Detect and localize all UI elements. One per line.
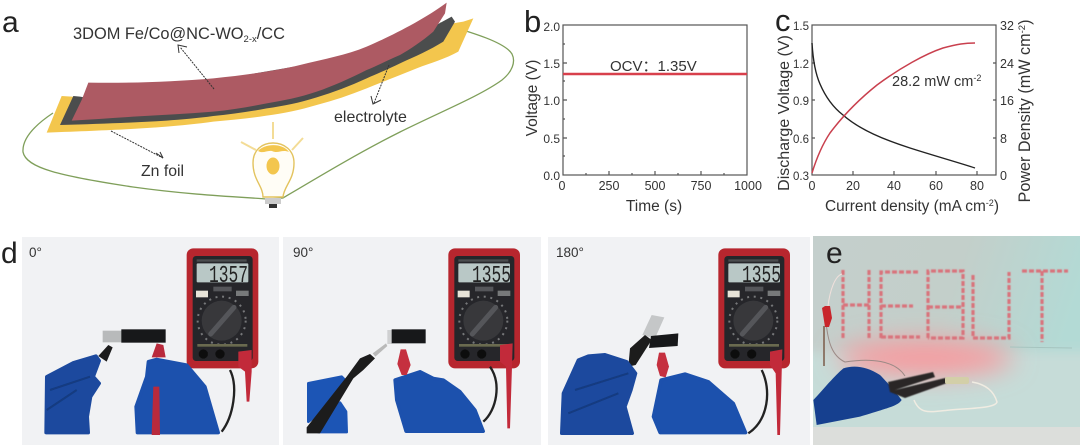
x axis tick labels: 80	[970, 179, 984, 193]
flexible battery strip	[103, 329, 166, 343]
peak power label: -2	[973, 73, 981, 83]
arrow to cathode label	[178, 45, 214, 89]
left glove upper	[308, 377, 347, 422]
paper edge	[1010, 347, 1072, 348]
photo: 90 degrees	[283, 237, 541, 445]
Zn foil layer	[47, 18, 473, 133]
cathode label: 2-x	[244, 34, 257, 45]
panel e: HEBUT LED photo	[790, 236, 1080, 447]
left glove shading	[47, 377, 90, 410]
Zn foil label: Zn foil	[141, 163, 184, 180]
right y axis title: -2	[1017, 25, 1028, 33]
icon: light bulb	[241, 122, 303, 208]
left glove	[46, 356, 99, 433]
lead wires	[483, 367, 497, 422]
photo background	[813, 236, 1080, 358]
electrolyte layer	[60, 17, 455, 125]
photo: 180 degrees	[548, 237, 810, 445]
y axis tick labels: 2.0	[543, 20, 560, 34]
x axis tick labels	[559, 179, 762, 193]
blue gloved hand	[813, 367, 902, 425]
x axis tick labels: 250	[599, 179, 619, 193]
electrolyte label: electrolyte	[334, 109, 407, 126]
right y axis tick labels: 16	[1000, 94, 1014, 108]
y axis tick labels: 0.0	[543, 169, 560, 183]
cathode label: 3DOM Fe/Co@NC-WO	[73, 25, 244, 43]
x axis tick labels: 750	[691, 179, 711, 193]
power density curve	[812, 43, 975, 173]
multimeter 90 degrees	[448, 248, 520, 368]
right y axis tick labels	[1000, 19, 1014, 183]
x axis tick labels	[809, 179, 984, 193]
black probe	[628, 335, 652, 367]
y axis title: Voltage (V)	[524, 60, 541, 136]
panel c: discharge and power density chart	[775, 3, 1034, 215]
meter reading 0 degrees: 1357	[209, 263, 248, 290]
white battery loop wire	[914, 382, 997, 412]
LED letters HEBUT	[843, 270, 1068, 342]
left y axis title: Discharge Voltage (V)	[776, 35, 793, 191]
meter reading 180 degrees: 1355	[742, 263, 781, 290]
panel label a: a	[2, 6, 19, 39]
x axis tick labels: 20	[846, 179, 860, 193]
panel label c: c	[775, 3, 790, 38]
angle label 180: 180°	[556, 245, 584, 260]
discharge voltage curve	[812, 43, 975, 168]
red LED glow	[837, 340, 1013, 376]
black probe	[307, 354, 375, 433]
left glove	[562, 355, 636, 433]
left glove lower	[318, 403, 347, 432]
x axis tick labels: 500	[645, 179, 665, 193]
x axis tick labels: 0	[809, 179, 816, 193]
plot frame and ticks	[812, 25, 996, 175]
y axis tick labels	[543, 20, 560, 183]
peak power label: 28.2 mW cm	[892, 74, 973, 90]
probe metal tip	[373, 343, 387, 357]
panel label e: e	[826, 237, 843, 270]
x axis title: )	[994, 198, 999, 215]
red probe on meter	[238, 350, 252, 402]
right glove	[653, 374, 746, 433]
x axis tick labels: 60	[929, 179, 943, 193]
x axis title: Time (s)	[626, 198, 682, 215]
photo: 0 degrees	[22, 237, 279, 445]
x axis title: -2	[986, 198, 994, 208]
angle label 90: 90°	[293, 245, 313, 260]
y axis tick labels: 0.5	[543, 132, 560, 146]
red probe on meter	[500, 343, 513, 428]
plot frame and ticks	[563, 25, 747, 175]
multimeter 0 degrees	[187, 248, 258, 368]
panel a: battery schematic	[2, 3, 514, 208]
right y axis title: )	[1016, 20, 1034, 25]
x axis tick labels: 40	[887, 179, 901, 193]
lower surface	[813, 352, 1080, 427]
left y axis tick labels: 0.9	[793, 96, 809, 108]
flexible battery strip	[387, 329, 426, 344]
cathode sheet	[72, 3, 447, 121]
left y axis tick labels: 0.6	[793, 134, 809, 146]
external circuit wire	[23, 23, 514, 199]
left y axis tick labels	[793, 21, 809, 183]
left y axis tick labels: 0.3	[793, 171, 809, 183]
x axis tick labels: 0	[559, 179, 566, 193]
lead wires	[222, 370, 234, 432]
red probe tip	[657, 353, 669, 377]
arrow to electrolyte label	[371, 65, 389, 104]
y axis tick labels: 1.0	[543, 94, 560, 108]
multimeter 180 degrees	[718, 248, 790, 368]
y axis tick labels: 1.5	[543, 57, 560, 71]
right y axis tick labels: 0	[1000, 169, 1007, 183]
red clip and wire	[822, 274, 905, 376]
right y axis tick labels: 32	[1000, 19, 1014, 33]
OCV label: OCV：1.35V	[610, 58, 697, 75]
left glove shading	[568, 373, 628, 413]
panel label b: b	[524, 4, 541, 39]
flexible battery strip	[642, 315, 678, 348]
right y axis title: Power Density (mW cm	[1016, 33, 1034, 202]
panel label d: d	[1, 237, 18, 270]
right y axis tick labels: 8	[1000, 132, 1007, 146]
x axis tick labels: 1000	[734, 179, 762, 193]
lead wires	[748, 370, 767, 433]
right y axis tick labels: 24	[1000, 57, 1014, 71]
left y axis tick labels: 1.5	[793, 21, 809, 33]
black clips	[888, 372, 950, 398]
meter reading 90 degrees: 1355	[472, 263, 511, 290]
x axis title: Current density (mA cm	[825, 198, 986, 215]
panel b: open circuit voltage chart	[524, 4, 762, 215]
right glove	[395, 372, 483, 431]
red probe tip	[397, 349, 411, 375]
bottom edge	[813, 427, 1080, 445]
arrow to Zn foil label	[111, 131, 163, 158]
red probe tip	[152, 343, 166, 357]
red voltage line	[563, 73, 747, 75]
angle label 0: 0°	[29, 245, 42, 260]
battery strip	[945, 377, 969, 384]
right glove	[136, 359, 218, 433]
red probe in hand	[152, 387, 160, 435]
cathode label: /CC	[257, 25, 285, 43]
black probe tip	[98, 345, 113, 362]
left y axis tick labels: 1.2	[793, 59, 809, 71]
red probe on meter	[770, 349, 782, 435]
